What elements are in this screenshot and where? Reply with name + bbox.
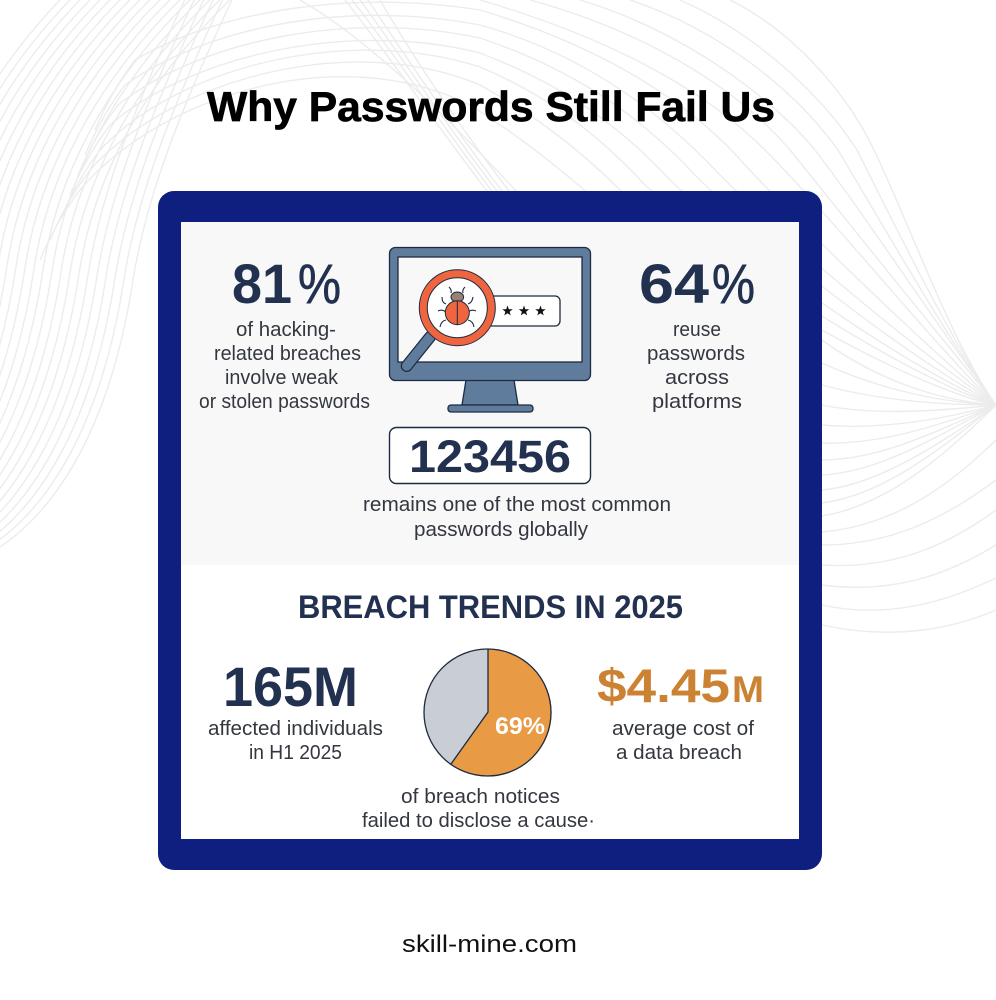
stat: 64 percent: % [712,252,755,315]
stat: average cost: average cost of [612,718,754,740]
stat: 165M [208,655,383,764]
pie chart: 69 percent: failed to disclose a cause· [362,810,595,832]
stat: 81 percent: involve weak [225,367,339,389]
stat: average cost: $4.45 [597,659,730,712]
stat: average cost: M [732,669,764,710]
pie chart: 69 percent: of breach notices [401,786,560,808]
heading: breach trends: BREACH TRENDS IN 2025 [298,589,683,625]
stat: 165M: in H1 2025 [249,742,342,764]
title: Why Passwords Still Fail Us [207,83,775,130]
panel: infographic frame [158,191,822,870]
stat: 81 percent: or stolen passwords [199,391,370,413]
footer url: skill-mine.com [402,931,577,958]
stat: 165M: affected individuals [208,718,383,740]
stat: 81 percent: 81 [232,252,292,315]
stat: 81 percent: of hacking- [236,319,336,341]
stat: 81 percent [199,252,370,413]
stat: 81 percent: % [298,252,341,315]
pie chart: 69 percent: 69% [495,713,545,740]
stat: 64 percent [639,252,755,413]
callout: common password: remains one of the most common [363,494,671,516]
callout: common password: passwords globally [414,519,588,541]
stat: 64 percent: passwords [647,343,745,365]
stat: 64 percent: across [665,367,729,389]
pie chart: 69 percent [362,649,595,832]
stat: average cost: a data breach [616,742,742,764]
callout: common password [363,428,671,541]
stat: average cost [597,659,764,764]
stat: 64 percent: platforms [652,391,742,413]
stat: 64 percent: reuse [673,319,721,341]
stat: 165M: 165M [223,655,358,718]
icon: monitor with magnifier and bug [390,248,590,412]
callout: common password: 123456 [409,431,571,482]
stat: 81 percent: related breaches [214,343,361,365]
stat: 64 percent: 64 [639,252,709,315]
